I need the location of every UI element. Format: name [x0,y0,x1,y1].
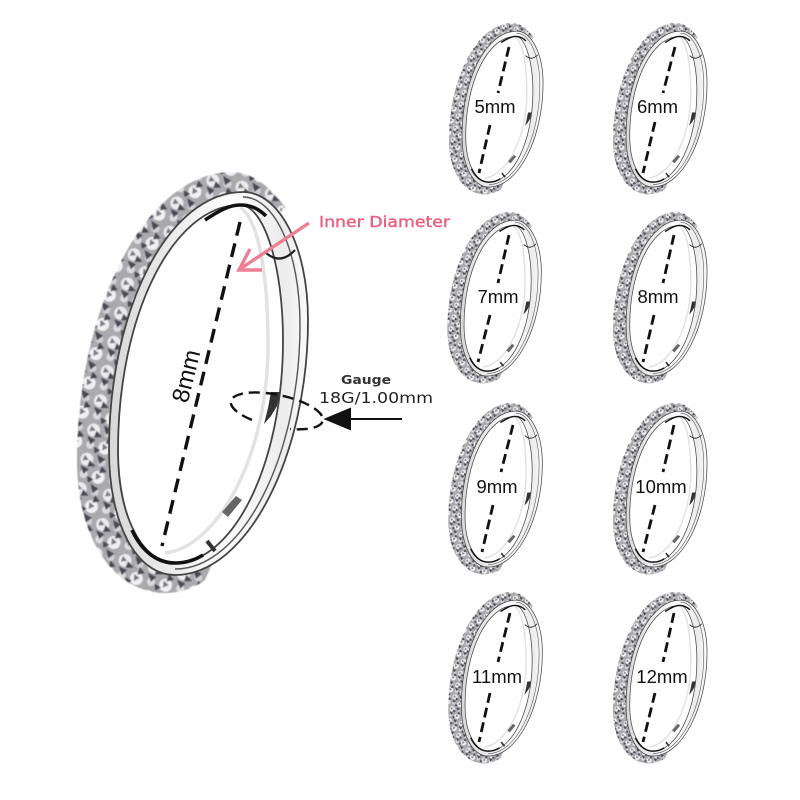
ring: 7mm [447,212,541,383]
ring: 6mm: 6mm [637,96,678,117]
gauge heading: Gauge [341,373,391,387]
ring: 5mm: 5mm [474,96,516,117]
diameter label: 8mm [167,347,206,405]
ring: 11mm: 11mm [472,666,522,687]
ring: 8mm [613,212,707,383]
ring: 8mm: 8mm [637,286,679,307]
inner diameter label: Inner Diameter [319,213,451,231]
main ring: 8mm [77,172,308,593]
inner diameter arrow [239,223,309,270]
inner diameter callout [239,213,451,270]
gauge arrow [326,409,402,429]
diameter dashed line [162,222,240,546]
ring: 9mm [448,403,542,574]
ring: 11mm [448,592,542,763]
gauge value: 18G/1.00mm [319,389,433,407]
ring: 5mm [449,23,543,194]
ring: 10mm [613,403,707,574]
ring: 6mm [613,23,707,194]
gauge dashed ellipse [231,392,323,429]
ring: 7mm: 7mm [477,286,519,307]
ring: 12mm: 12mm [636,666,688,687]
ring: 12mm [613,592,707,763]
ring: 9mm: 9mm [476,476,518,497]
ring: 10mm: 10mm [635,476,687,497]
gauge callout [231,373,433,429]
